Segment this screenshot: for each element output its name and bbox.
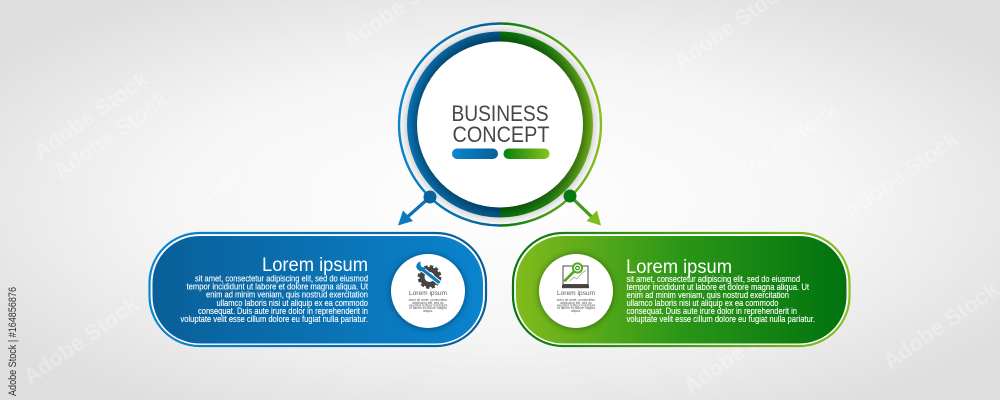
panel: green [513,233,850,346]
circle caption: adipiscing elit, sed do [560,301,592,305]
circle caption: aliqua. [571,309,581,313]
heading: BUSINESS [452,101,548,126]
circle caption: ut labore et dolore magna [557,306,595,310]
heading [452,101,550,147]
arrow: to blue panel [398,190,436,226]
outer ring [399,24,601,226]
panel: blue [150,233,486,346]
circle caption: adipiscing elit, sed do [412,301,444,305]
text: Adobe Stock [49,86,174,184]
panel body text: enim ad minim veniam, quis nostrud exercitation [206,290,368,300]
panel body text: tempor incididunt ut labore et dolore magna aliqua. Ut [186,282,368,292]
white centre disc [417,42,583,208]
arrow: to green panel [564,190,601,226]
panel body text: tempor incididunt ut labore et dolore magna aliqua. Ut [626,282,809,292]
circle caption [409,298,448,313]
text: Adobe Stock [719,96,844,194]
central concept circle [399,24,601,226]
icon: monitor with magnifier [562,263,589,288]
circle caption: dolor sit amet, consectetur [557,298,596,302]
panel body text: consequat. Duis aute irure dolor in reprehenderit in [198,306,368,316]
panel body text [180,274,368,324]
text: Adobe Stock [879,276,1000,374]
icon: gear and wrench [416,262,440,288]
circle caption: eiusmod tempor incididunt [409,303,447,307]
circle caption [557,298,596,313]
stock image id text: Adobe Stock | #164856876 [7,287,19,396]
circle caption: eiusmod tempor incididunt [557,303,595,307]
panel body text: ullamco laboris nisi ut aliquip ex ea commodo [626,298,778,308]
gradient band [407,32,593,218]
inner circle card: Lorem ipsum [409,290,448,297]
inner circle card: Lorem ipsum [557,290,596,297]
panel body text: sit amet, consectetur adipiscing elit, sed do eiusmod [626,274,800,284]
text: Adobe Stock [679,301,804,399]
text: Adobe Stock [179,121,304,219]
panel body text: sit amet, consectetur adipiscing elit, sed do eiusmod [195,274,368,284]
text: Adobe Stock [19,291,144,389]
circle caption: aliqua. [423,309,433,313]
panel body text [626,274,815,324]
panel body text: voluptate velit esse cillum dolore eu fugiat nulla pariatur. [626,314,815,324]
panel body text: enim ad minim veniam, quis nostrud exercitation [626,290,789,300]
panel body text: ullamco laboris nisi ut aliquip ex ea commodo [216,298,368,308]
panel heading: Lorem ipsum [262,254,368,276]
panel body text: voluptate velit esse cillum dolore eu fugiat nulla pariatur. [180,314,368,324]
text: Adobe Stock [839,126,964,224]
accent pills [452,148,550,159]
circle caption: dolor sit amet, consectetur [409,298,448,302]
text: Adobe Stock [29,66,154,164]
panel heading: Lorem ipsum [626,256,732,278]
panel body text: consequat. Duis aute irure dolor in reprehenderit in [626,306,797,316]
inner circle card [391,254,465,328]
circle caption: ut labore et dolore magna [409,306,447,310]
heading: CONCEPT [452,122,550,147]
inner circle card [539,254,613,328]
